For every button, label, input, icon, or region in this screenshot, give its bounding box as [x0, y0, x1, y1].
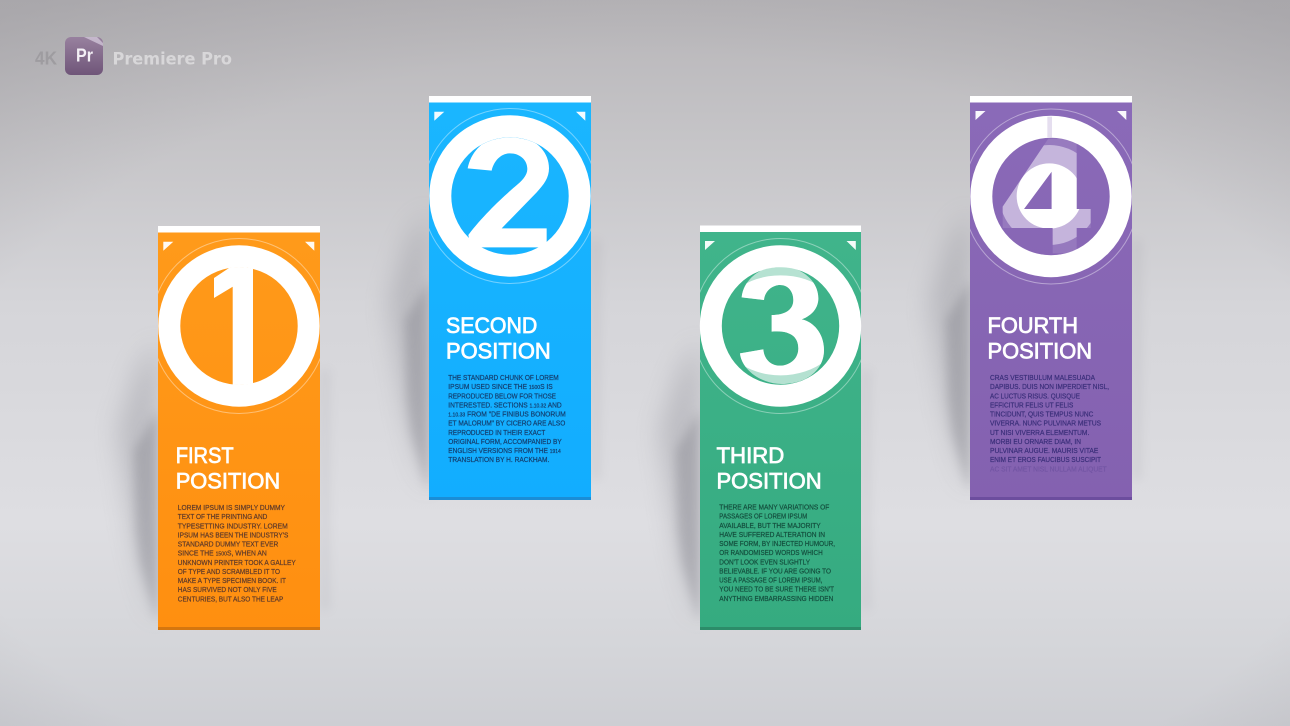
body text: AC SIT AMET NISL NULLAM ALIQUET: [990, 464, 1107, 473]
body text: ANYTHING EMBARRASSING HIDDEN: [719, 594, 833, 603]
body text: BELIEVABLE. IF YOU ARE GOING TO: [719, 566, 831, 575]
body text: STANDARD DUMMY TEXT EVER: [178, 540, 278, 548]
heading: POSITION: [446, 338, 551, 364]
body text: MAKE A TYPE SPECIMEN BOOK. IT: [178, 576, 286, 585]
heading: [988, 313, 1092, 364]
body text: 1.10.33 FROM "DE FINIBUS BONORUM: [448, 410, 566, 418]
heading: FOURTH: [988, 313, 1078, 338]
corner marks: [434, 112, 585, 121]
body text: PULVINAR AUGUE. MAURIS VITAE: [990, 446, 1098, 455]
body text: EFFICITUR FELIS UT FELIS: [990, 400, 1073, 409]
body text: ORIGINAL FORM, ACCOMPANIED BY: [448, 437, 562, 446]
body text: HAVE SUFFERED ALTERATION IN: [719, 530, 825, 539]
top white band: [429, 96, 591, 102]
thin outer ring: [693, 238, 868, 414]
body text: VIVERRA. NUNC PULVINAR METUS: [990, 419, 1101, 428]
heading: POSITION: [176, 468, 280, 494]
body text: TINCIDUNT, QUIS TEMPUS NUNC: [990, 410, 1094, 418]
body text: LOREM IPSUM IS SIMPLY DUMMY: [178, 503, 285, 512]
corner marks: [163, 242, 314, 251]
body text: CRAS VESTIBULUM MALESUADA: [990, 373, 1095, 382]
white ring: [169, 256, 309, 396]
numeral 4: [1003, 117, 1091, 253]
body text: CENTURIES, BUT ALSO THE LEAP: [178, 594, 283, 603]
heading: [176, 443, 280, 494]
heading: [716, 443, 822, 494]
body text: ENIM ET EROS FAUCIBUS SUSCIPIT: [990, 455, 1101, 464]
body text: OR RANDOMISED WORDS WHICH: [719, 548, 823, 557]
body text: HAS SURVIVED NOT ONLY FIVE: [178, 585, 277, 594]
numeral 3: [740, 266, 824, 384]
label: 4K: 4K: [35, 48, 57, 68]
body text: PASSAGES OF LOREM IPSUM: [719, 512, 807, 521]
bottom edge: [429, 497, 591, 500]
thin outer ring: [422, 108, 598, 284]
body text: REPRODUCED IN THEIR EXACT: [448, 428, 546, 437]
body text: REPRODUCED BELOW FOR THOSE: [448, 391, 556, 400]
heading: FIRST: [176, 443, 234, 468]
body text: INTERESTED. SECTIONS 1.10.32 AND: [448, 400, 562, 409]
thin outer ring: [964, 109, 1138, 284]
numeral 2: [468, 135, 549, 247]
body text: THE STANDARD CHUNK OF LOREM: [448, 373, 559, 382]
white ring: [440, 126, 580, 266]
bottom edge: [700, 627, 861, 630]
body text: UNKNOWN PRINTER TOOK A GALLEY: [178, 558, 296, 567]
logo: Premiere Pro watermark: [35, 37, 232, 75]
body text: THERE ARE MANY VARIATIONS OF: [719, 502, 830, 512]
body text: [448, 373, 566, 464]
body text: UT NISI VIVERRA ELEMENTUM.: [990, 428, 1089, 437]
card body: [158, 232, 320, 630]
body text: DON'T LOOK EVEN SLIGHTLY: [719, 557, 810, 566]
corner marks: [976, 111, 1126, 120]
top white band: [970, 96, 1132, 102]
body text: AC LUCTUS RISUS. QUISQUE: [990, 391, 1080, 400]
body text: TYPESETTING INDUSTRY. LOREM: [178, 521, 288, 530]
body text: [178, 503, 296, 603]
label: Premiere Pro: Premiere Pro: [112, 49, 232, 69]
top white band: [158, 226, 320, 232]
body text: OF TYPE AND SCRAMBLED IT TO: [178, 567, 280, 576]
numeral 1: [214, 267, 253, 385]
body text: SOME FORM, BY INJECTED HUMOUR,: [719, 539, 835, 548]
body text: USE A PASSAGE OF LOREM IPSUM,: [719, 576, 822, 584]
body text: YOU NEED TO BE SURE THERE ISN'T: [719, 585, 834, 594]
body text: TRANSLATION BY H. RACKHAM.: [448, 455, 549, 464]
body text: ET MALORUM" BY CICERO ARE ALSO: [448, 419, 566, 428]
heading: SECOND: [446, 313, 537, 338]
body text: SINCE THE 1500S, WHEN AN: [178, 549, 267, 558]
white ring: [711, 256, 850, 396]
body text: IPSUM USED SINCE THE 1500S IS: [448, 382, 553, 391]
panel: first position: [152, 226, 326, 630]
card body: [970, 102, 1132, 500]
heading: POSITION: [716, 468, 822, 494]
heading: THIRD: [716, 443, 784, 468]
heading: POSITION: [988, 338, 1092, 364]
body text: MORBI EU ORNARE DIAM, IN: [990, 437, 1081, 446]
corner marks: [705, 241, 856, 250]
heading: [446, 313, 551, 364]
panel: fourth position: [964, 96, 1138, 500]
bottom edge: [970, 497, 1132, 500]
card body: [700, 232, 861, 630]
body text: DAPIBUS. DUIS NON IMPERDIET NISL,: [990, 382, 1109, 391]
top white band: [700, 226, 861, 232]
body text: ENGLISH VERSIONS FROM THE 1914: [448, 446, 561, 455]
card shadows: [118, 210, 1142, 620]
panel: second position: [422, 96, 598, 500]
body text: [990, 373, 1109, 473]
panel: third position: [693, 226, 868, 630]
bottom edge: [158, 627, 320, 630]
body text: AVAILABLE, BUT THE MAJORITY: [719, 521, 821, 530]
body text: [719, 502, 835, 603]
thin outer ring: [152, 238, 326, 414]
card body: [429, 102, 591, 500]
body text: TEXT OF THE PRINTING AND: [178, 512, 267, 521]
white ring: [981, 127, 1121, 266]
icon: Pr badge: Pr: [76, 46, 93, 66]
icon: Pr badge: [65, 37, 103, 75]
body text: IPSUM HAS BEEN THE INDUSTRY'S: [178, 530, 288, 539]
